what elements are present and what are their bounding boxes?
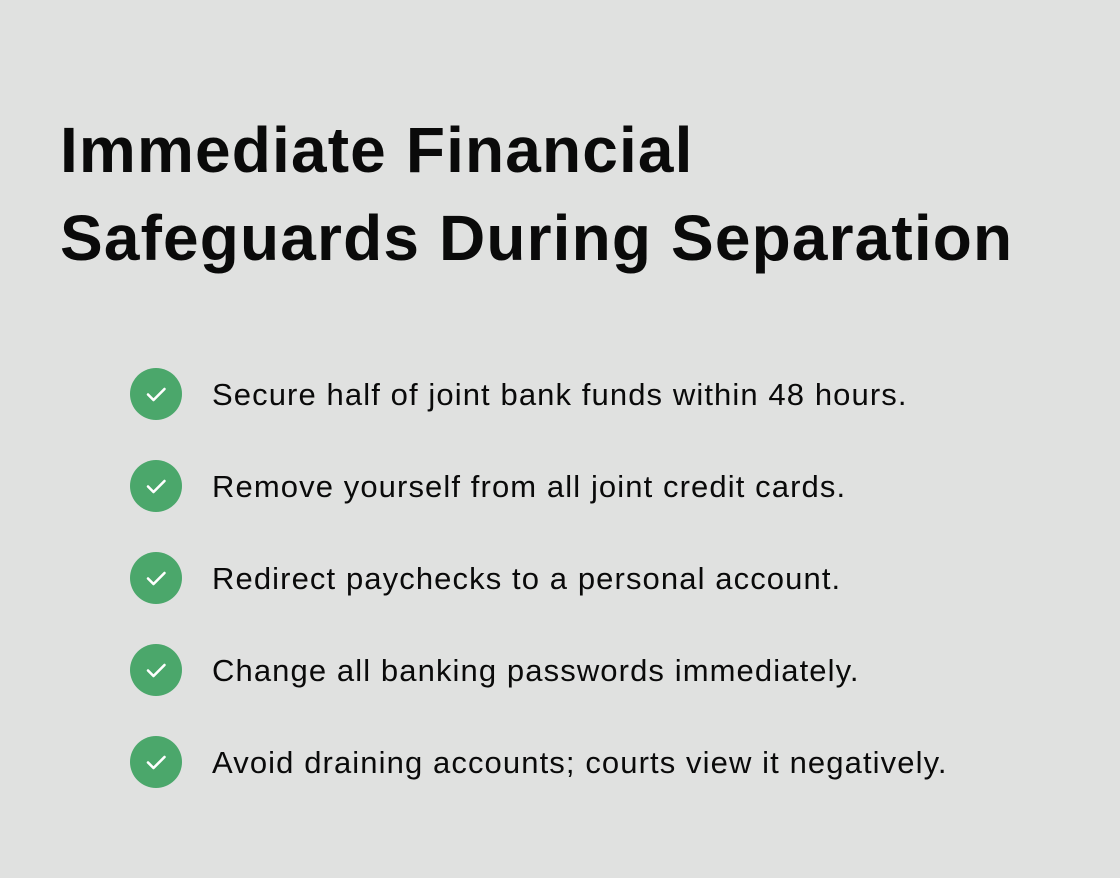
title: Safeguards During Separation bbox=[60, 202, 1013, 274]
item 3 bbox=[130, 552, 841, 604]
item 2 bbox=[130, 460, 846, 512]
item 2: Remove yourself from all joint credit cards. bbox=[212, 469, 846, 504]
icon: check circle bbox=[130, 644, 182, 696]
icon: check circle bbox=[130, 736, 182, 788]
icon: check circle bbox=[130, 460, 182, 512]
item 5 bbox=[130, 736, 948, 788]
icon: check circle bbox=[130, 368, 182, 420]
item 4: Change all banking passwords immediately. bbox=[212, 653, 860, 688]
item 4 bbox=[130, 644, 860, 696]
item 1: Secure half of joint bank funds within 48 hours. bbox=[212, 377, 908, 412]
icon: check circle bbox=[130, 552, 182, 604]
title bbox=[60, 114, 1013, 274]
title: Immediate Financial bbox=[60, 114, 694, 186]
item 3: Redirect paychecks to a personal account. bbox=[212, 561, 841, 596]
item 5: Avoid draining accounts; courts view it negatively. bbox=[212, 745, 948, 780]
item 1 bbox=[130, 368, 908, 420]
